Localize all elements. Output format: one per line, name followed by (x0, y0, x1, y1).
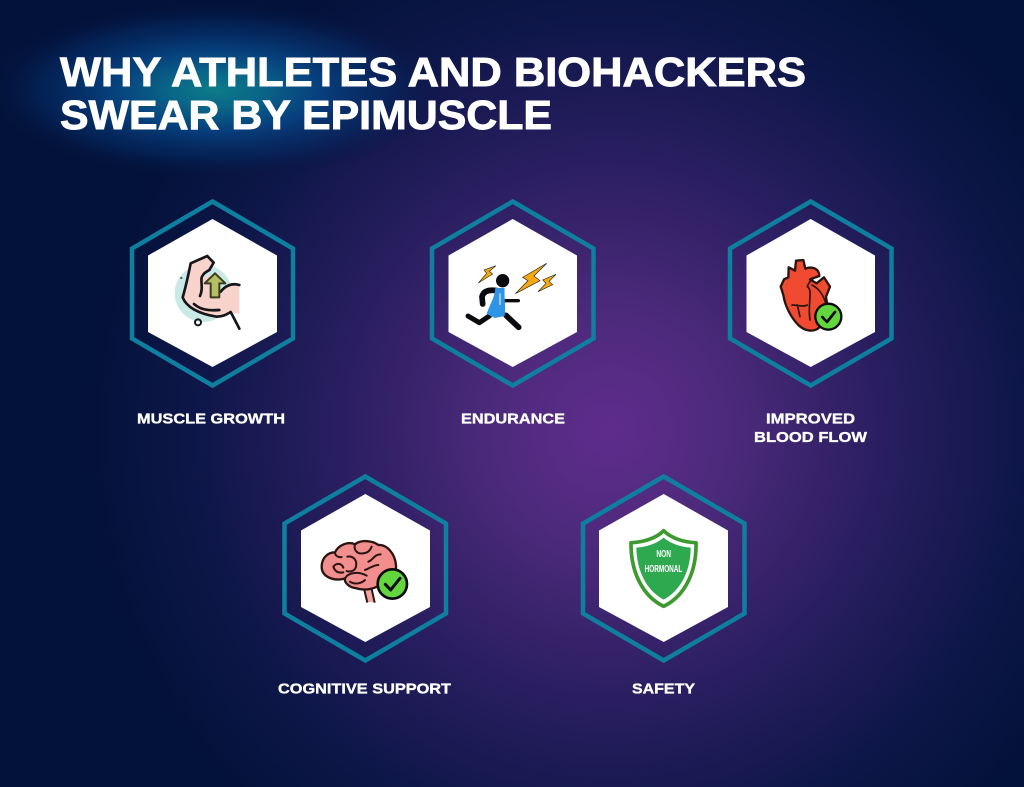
panel: muscle growth (132, 202, 293, 428)
panel: cognitive support (278, 476, 451, 698)
hexagon badge: improved blood flow (730, 202, 892, 386)
label: MUSCLE GROWTH (137, 410, 285, 428)
icon: flexed bicep with up arrow (175, 256, 239, 329)
label (754, 410, 868, 446)
hexagon badge: cognitive support (284, 476, 446, 660)
title: WHY ATHLETES AND BIOHACKERS (60, 49, 806, 95)
icon: running athlete with lightning bolts (468, 263, 556, 327)
title (60, 49, 806, 138)
panel: improved blood flow (730, 202, 892, 446)
hexagon badge: safety (583, 476, 744, 660)
panel: endurance (432, 202, 594, 428)
label: SAFETY (632, 680, 695, 698)
label: BLOOD FLOW (754, 429, 868, 446)
icon: non hormonal shield: HORMONAL (645, 564, 682, 575)
label: ENDURANCE (461, 410, 565, 428)
title: SWEAR BY EPIMUSCLE (60, 92, 552, 138)
hexagon badge: endurance (432, 202, 594, 386)
icon: non hormonal shield (631, 531, 696, 606)
hexagon badge: muscle growth (132, 202, 293, 386)
icon: heart with check mark (781, 260, 841, 331)
icon: brain with check mark (322, 541, 407, 603)
panel: safety (583, 476, 744, 698)
label: COGNITIVE SUPPORT (278, 680, 451, 698)
label: IMPROVED (766, 410, 855, 428)
icon: non hormonal shield: NON (656, 549, 671, 560)
